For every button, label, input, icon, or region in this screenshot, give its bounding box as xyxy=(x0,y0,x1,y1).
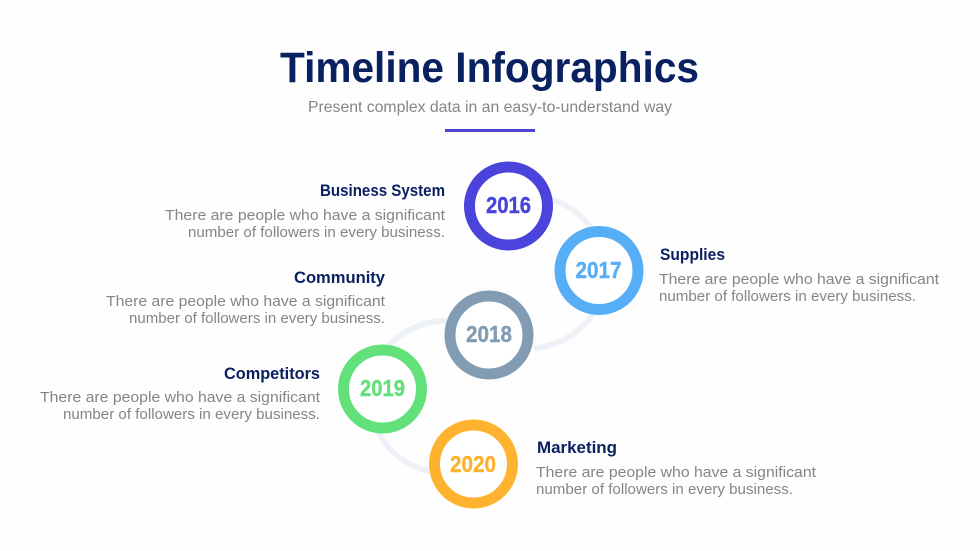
text block: Competitors: number of followers in every business. xyxy=(63,406,320,423)
timeline node 2017 xyxy=(560,232,638,310)
text block: Community xyxy=(106,268,386,327)
text block: Business System: Business System xyxy=(320,181,445,200)
connector arc: 2018 to 2020 xyxy=(369,321,450,472)
subtitle: Present complex data in an easy-to-understand way xyxy=(308,99,672,116)
text block: Marketing: There are people who have a significant xyxy=(536,464,817,481)
text block: Business System: There are people who have a significant xyxy=(165,207,446,224)
timeline node 2020 xyxy=(434,425,512,503)
text block: Supplies xyxy=(659,245,940,305)
text block: Supplies: There are people who have a significant xyxy=(659,271,940,288)
text block: Supplies: Supplies xyxy=(660,245,725,264)
text block: Community: Community xyxy=(294,268,386,287)
text block: Competitors: Competitors xyxy=(224,364,320,383)
connector arc: 2016 to 2018 xyxy=(534,199,605,348)
timeline node 2018: 2018 xyxy=(466,321,512,347)
timeline node 2017: 2017 xyxy=(576,257,622,283)
timeline node 2018 xyxy=(450,296,528,374)
timeline node 2016: 2016 xyxy=(486,192,531,218)
title underline xyxy=(445,129,535,132)
title: Timeline Infographics xyxy=(280,44,699,92)
text block: Supplies: number of followers in every business. xyxy=(659,288,916,305)
text block: Business System: number of followers in every business. xyxy=(188,224,445,241)
text block: Competitors xyxy=(40,364,321,423)
text block: Community: number of followers in every business. xyxy=(129,310,385,327)
timeline node 2019: 2019 xyxy=(360,375,405,401)
text block: Business System xyxy=(165,181,446,241)
timeline node 2016 xyxy=(470,167,548,245)
timeline node 2020: 2020 xyxy=(450,451,496,477)
text block: Competitors: There are people who have a significant xyxy=(40,389,321,406)
text block: Marketing: number of followers in every business. xyxy=(536,481,793,498)
timeline node 2019 xyxy=(344,350,422,428)
text block: Community: There are people who have a significant xyxy=(106,293,386,310)
text block: Marketing xyxy=(536,438,817,498)
text block: Marketing: Marketing xyxy=(537,438,617,457)
